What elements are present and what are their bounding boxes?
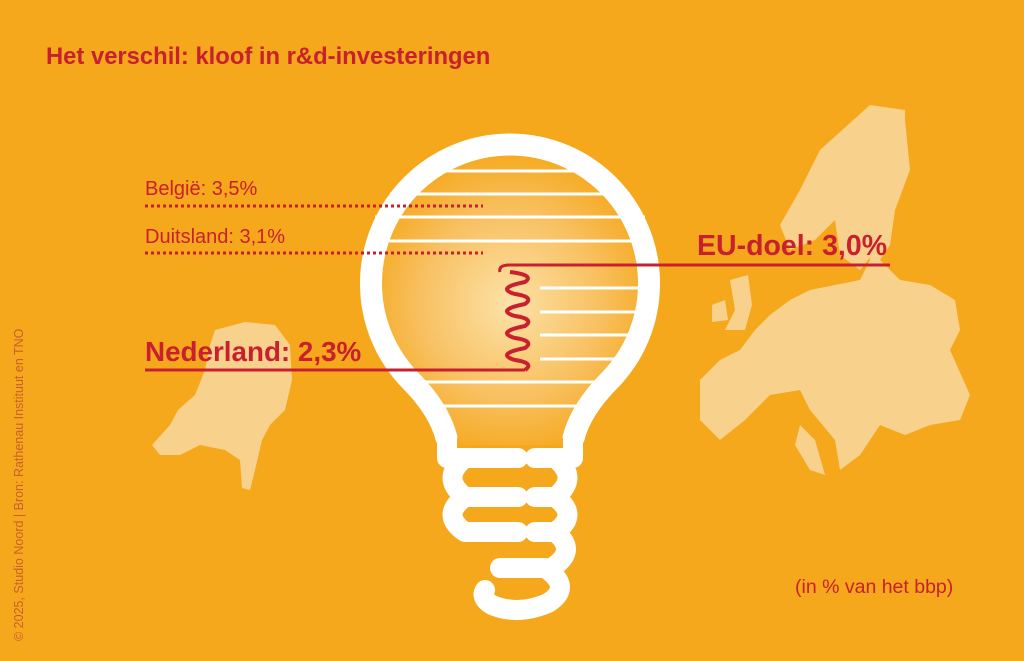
bulb: inner lines	[370, 171, 650, 406]
title: Het verschil: kloof in r&d-investeringen	[46, 43, 490, 70]
credit (vertical): © 2025, Studio Noord | Bron: Rathenau Instituut en TNO	[12, 329, 26, 641]
bulb: glass fill	[359, 132, 661, 445]
unit note: (in % van het bbp)	[795, 576, 953, 598]
label: EU-doel: EU-doel: 3,0%	[697, 230, 887, 262]
map: Europe	[700, 105, 970, 475]
label: Duitsland: Duitsland: 3,1%	[145, 226, 285, 248]
line: Nederland + filament	[145, 272, 528, 370]
dotted line: Duitsland	[145, 252, 483, 254]
dotted line: België	[145, 204, 483, 208]
map: Netherlands	[152, 322, 292, 490]
line: EU-doel	[500, 265, 890, 272]
label: België: België: 3,5%	[145, 178, 257, 200]
bulb: screw base	[447, 438, 573, 610]
bulb: outline	[371, 144, 649, 440]
label: Nederland: Nederland: 2,3%	[145, 336, 361, 367]
